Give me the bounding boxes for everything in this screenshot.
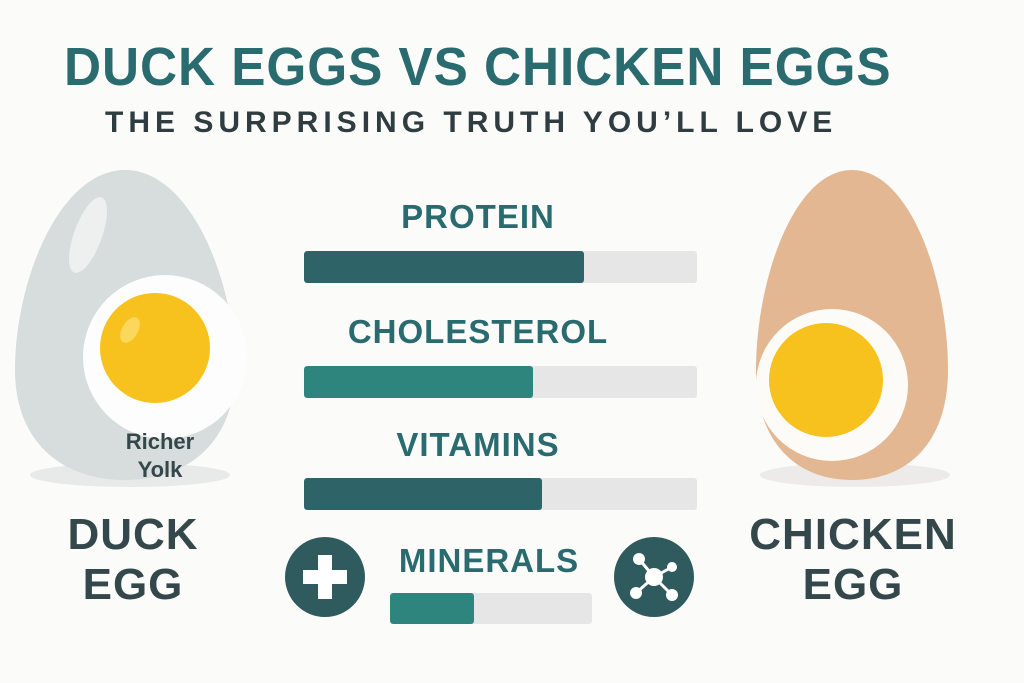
cholesterol label: CHOLESTEROL — [348, 313, 608, 350]
minerals bar — [390, 593, 592, 624]
richer yolk label: Richer — [126, 429, 194, 454]
title: DUCK EGGS VS CHICKEN EGGS — [64, 37, 892, 97]
cholesterol bar — [304, 366, 697, 398]
minerals label: MINERALS — [399, 542, 579, 579]
duck egg label: EGG — [83, 560, 183, 609]
chicken egg label: EGG — [803, 560, 903, 609]
chicken egg illustration — [756, 170, 950, 487]
chicken egg label — [749, 510, 957, 609]
protein bar — [304, 251, 697, 283]
subtitle: THE SURPRISING TRUTH YOU’LL LOVE — [105, 106, 837, 139]
duck egg label — [67, 510, 199, 609]
protein label: PROTEIN — [401, 198, 555, 235]
duck egg illustration — [15, 170, 230, 487]
duck egg label: DUCK — [67, 510, 199, 559]
vitamins label: VITAMINS — [396, 426, 560, 463]
icon: plus — [285, 537, 365, 617]
vitamins bar — [304, 478, 697, 510]
richer yolk label: Yolk — [138, 457, 182, 482]
richer yolk label — [126, 429, 194, 482]
icon: molecule — [614, 537, 694, 617]
chicken egg label: CHICKEN — [749, 510, 957, 559]
